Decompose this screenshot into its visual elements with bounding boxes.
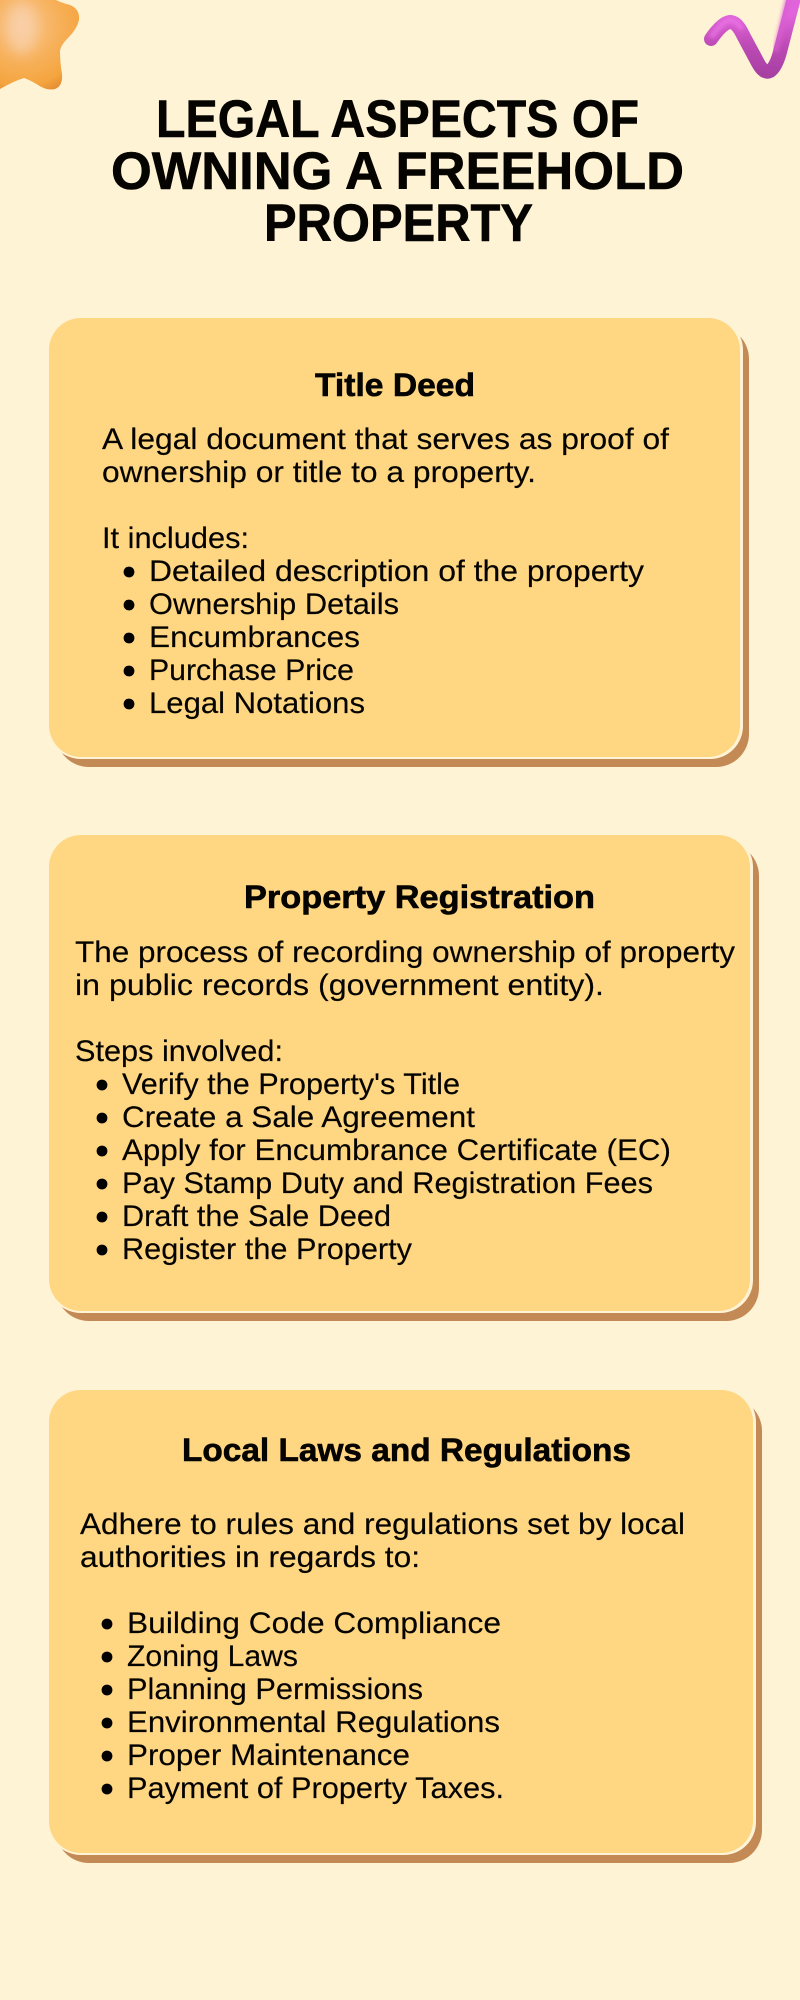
text: property registration description [75, 936, 735, 1068]
text: title deed description [102, 423, 670, 555]
icon: orange 3D star [0, 0, 79, 90]
panel: title deed [48, 317, 749, 767]
text: property registration description: in public records (government entity). [75, 969, 604, 1002]
text: title deed description: ownership or title to a property. [102, 456, 536, 489]
list: property registration steps: Draft the Sale Deed [122, 1200, 391, 1233]
title [111, 90, 684, 253]
list: property registration steps: Pay Stamp Duty and Registration Fees [122, 1167, 653, 1200]
list: local laws items: Planning Permissions [127, 1673, 423, 1706]
text: local laws description: authorities in regards to: [80, 1541, 420, 1574]
panel: local laws and regulations [48, 1389, 762, 1863]
panel: property registration [48, 834, 759, 1321]
list: property registration steps: Register the Property [122, 1233, 412, 1266]
heading: title deed: Title Deed [315, 367, 475, 403]
list: property registration steps: Verify the Property's Title [122, 1068, 460, 1101]
list: property registration steps: Apply for Encumbrance Certificate (EC) [122, 1134, 671, 1167]
text: local laws description: Adhere to rules and regulations set by local [80, 1508, 685, 1541]
list: title deed items: Purchase Price [149, 654, 354, 687]
list: title deed items: Detailed description of the property [149, 555, 644, 588]
list: local laws items [102, 1607, 504, 1805]
list: local laws items: Payment of Property Taxes. [127, 1772, 504, 1805]
list: property registration steps: Create a Sale Agreement [122, 1101, 476, 1134]
list: title deed items: Encumbrances [149, 621, 360, 654]
text: property registration description: Steps involved: [75, 1035, 283, 1068]
heading: local laws and regulations: Local Laws and Regulations [182, 1432, 631, 1468]
text: title deed description: A legal document that serves as proof of [102, 423, 670, 456]
icon: purple squiggle [711, 0, 795, 72]
list: title deed items: Legal Notations [149, 687, 365, 720]
list: title deed items [124, 555, 644, 720]
text: property registration description: The process of recording ownership of property [75, 936, 735, 969]
title: LEGAL ASPECTS OF [156, 90, 639, 149]
list: property registration steps [97, 1068, 671, 1266]
title: OWNING A FREEHOLD [111, 142, 684, 201]
list: title deed items: Ownership Details [149, 588, 399, 621]
list: local laws items: Environmental Regulations [127, 1706, 500, 1739]
title: PROPERTY [264, 194, 533, 253]
list: local laws items: Proper Maintenance [127, 1739, 410, 1772]
list: local laws items: Building Code Compliance [127, 1607, 501, 1640]
text: title deed description: It includes: [102, 522, 249, 555]
list: local laws items: Zoning Laws [127, 1640, 298, 1673]
heading: property registration: Property Registration [244, 879, 595, 915]
text: local laws description [80, 1508, 685, 1574]
